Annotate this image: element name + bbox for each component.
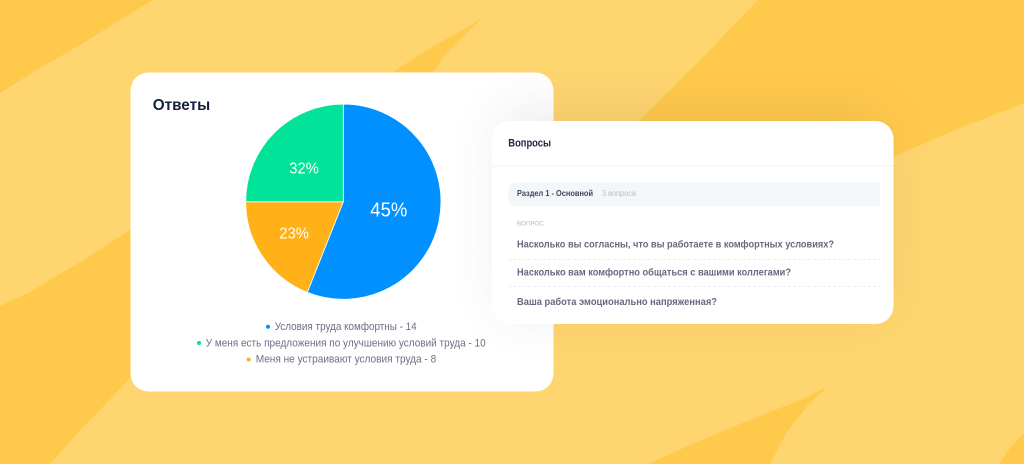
column label: ВОПРОС [517,221,544,228]
question 2: Насколько вам комфортно общаться с вашими коллегами? [517,267,791,279]
legend item: not satisfied: Меня не устраивают условия труда - 8 [256,354,436,366]
legend [197,321,486,366]
section bar [508,182,880,206]
panel: answers card [130,72,554,392]
heading: answers: Ответы [153,97,210,114]
legend item: comfortable: Условия труда комфортны - 14 [275,321,417,333]
heading: questions: Вопросы [508,138,551,150]
value: 32%: 32% [289,160,319,177]
question count: 3 вопроса [602,189,636,198]
section title: Раздел 1 - Основной [517,189,593,198]
card shadow [500,112,885,312]
value: 45%: 45% [370,200,407,222]
question 3: Ваша работа эмоционально напряженная? [517,296,717,308]
legend item: suggestions: У меня есть предложения по улучшению условий труда - 10 [206,337,486,349]
value: 23%: 23% [279,225,309,242]
pie chart [246,104,441,299]
panel: questions card [492,121,894,324]
question 1: Насколько вы согласны, что вы работаете в комфортных условиях? [517,239,834,251]
